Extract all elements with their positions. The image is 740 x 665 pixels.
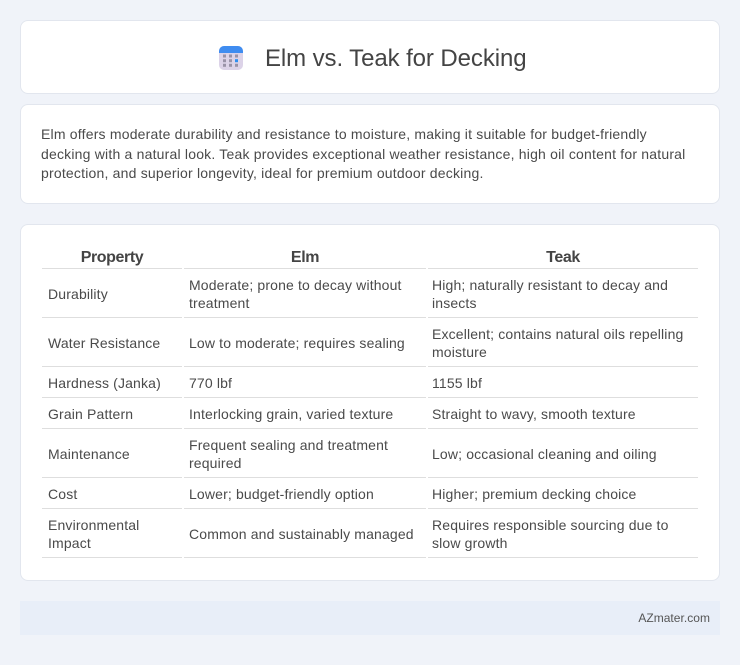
row: environmental impact: Impact	[48, 535, 91, 551]
panel: summary text: protection, and superior longevity, ideal for premium outdoor decking.	[41, 165, 484, 181]
row: durability: Durability	[48, 286, 108, 302]
row: grain pattern: Interlocking grain, varied texture	[189, 406, 393, 422]
row: hardness	[42, 375, 698, 398]
row: grain pattern: Straight to wavy, smooth texture	[432, 406, 636, 422]
table header: Property	[81, 249, 143, 266]
panel: summary text	[20, 104, 720, 204]
row: durability: High; naturally resistant to decay and	[432, 277, 668, 293]
row: hardness: 1155 lbf	[432, 375, 482, 391]
row: environmental impact: Requires responsible sourcing due to	[432, 517, 669, 533]
footer credit: AZmater.com	[638, 611, 710, 625]
row: environmental impact: Common and sustainably managed	[189, 526, 414, 542]
panel: comparison table	[20, 224, 720, 581]
row: environmental impact: Environmental	[48, 517, 139, 533]
row: durability: Moderate; prone to decay without	[189, 277, 402, 293]
row: water resistance: Low to moderate; requires sealing	[189, 335, 405, 351]
row: cost: Lower; budget-friendly option	[189, 486, 374, 502]
row: water resistance: Excellent; contains natural oils repelling	[432, 326, 683, 342]
row: maintenance: Maintenance	[48, 446, 130, 462]
panel: title header	[20, 20, 720, 94]
table header: Elm	[291, 249, 319, 266]
row: cost: Higher; premium decking choice	[432, 486, 636, 502]
row: water resistance	[42, 326, 698, 367]
panel: summary text: decking with a natural look. Teak provides exceptional weather resistance, high oil content for natural	[41, 146, 685, 162]
row: durability: insects	[432, 295, 477, 311]
row: hardness: 770 lbf	[189, 375, 232, 391]
footer	[20, 601, 720, 635]
row: grain pattern	[42, 406, 698, 429]
title: Elm vs. Teak for Decking	[265, 45, 526, 72]
row: cost	[42, 486, 698, 509]
table header: Teak	[546, 249, 580, 266]
row: durability: treatment	[189, 295, 250, 311]
row: water resistance: moisture	[432, 344, 487, 360]
row: cost: Cost	[48, 486, 77, 502]
row: maintenance: required	[189, 455, 242, 471]
row: maintenance: Low; occasional cleaning and oiling	[432, 446, 657, 462]
row: hardness: Hardness (Janka)	[48, 375, 161, 391]
row: water resistance: Water Resistance	[48, 335, 160, 351]
row: maintenance: Frequent sealing and treatment	[189, 437, 388, 453]
row: durability	[42, 268, 698, 318]
icon: calendar	[219, 46, 243, 70]
table header	[81, 249, 580, 266]
panel: summary text: Elm offers moderate durability and resistance to moisture, making it suitable for budget-friendly	[41, 126, 647, 142]
row: maintenance	[42, 437, 698, 478]
row: environmental impact	[42, 517, 698, 558]
row: grain pattern: Grain Pattern	[48, 406, 133, 422]
row: environmental impact: slow growth	[432, 535, 508, 551]
